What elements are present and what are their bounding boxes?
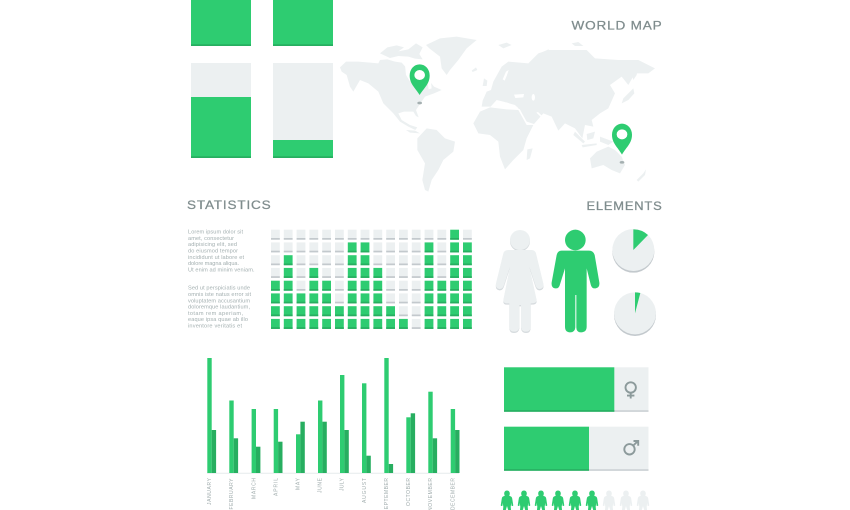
axis labels: months: JUNE bbox=[318, 477, 324, 493]
text block: first paragraph: Lorem ipsum dolor sit bbox=[188, 230, 243, 236]
bars: November bbox=[428, 392, 437, 473]
axis labels: months: AUGUST bbox=[362, 478, 368, 503]
axis labels: months: OCTOBER bbox=[406, 478, 412, 506]
block: top left bbox=[191, 0, 251, 46]
text block: second paragraph: Sed ut perspiciatis unde bbox=[188, 286, 250, 292]
heading: world map: WORLD MAP bbox=[572, 19, 662, 32]
gender bar: male bbox=[504, 427, 648, 471]
axis labels: months: DECEMBER bbox=[450, 478, 456, 510]
bars: July bbox=[340, 375, 349, 473]
text block: second paragraph: inventore veritatis et bbox=[188, 324, 242, 330]
text block: second paragraph: doloremque laudantium, bbox=[188, 305, 250, 311]
text block: second paragraph: eaque ipsa quae ab illo bbox=[188, 317, 248, 323]
text block: first paragraph: incididunt ut labore et bbox=[188, 255, 244, 261]
bars: February bbox=[229, 400, 238, 473]
text block: second paragraph: voluptatem accusantium bbox=[188, 298, 250, 304]
bars: August bbox=[362, 383, 371, 473]
axis labels: months: FEBRUARY bbox=[229, 478, 235, 510]
bars: April bbox=[274, 409, 282, 473]
axis labels: months: JANUARY bbox=[207, 477, 213, 505]
bars: December bbox=[451, 409, 460, 473]
gender bar: female bbox=[504, 367, 648, 412]
panel: percentage blocks bbox=[191, 0, 333, 158]
axis labels: months: MARCH bbox=[252, 478, 258, 499]
map pin: Australia bbox=[612, 124, 632, 164]
bar chart: monthly values bbox=[207, 358, 460, 474]
pie chart: upper bbox=[612, 229, 654, 273]
pie chart: lower bbox=[614, 292, 656, 336]
text block: first paragraph: do eiusmod tempor bbox=[188, 248, 238, 254]
bars: June bbox=[318, 400, 327, 473]
icon: male symbol bbox=[624, 441, 638, 454]
map pin: North America bbox=[410, 64, 430, 104]
text block: first paragraph: Ut enim ad minim veniam. bbox=[188, 268, 255, 274]
text block: first paragraph: amet, consectetur bbox=[188, 236, 234, 242]
axis labels: months: JULY bbox=[340, 477, 346, 491]
bars: January bbox=[207, 358, 216, 473]
axis labels: months: APRIL bbox=[274, 478, 280, 496]
axis labels: months: MAY bbox=[296, 477, 302, 490]
heading: statistics: STATISTICS bbox=[187, 199, 272, 212]
icon: female symbol bbox=[626, 382, 636, 398]
bars: May bbox=[296, 422, 305, 473]
icon: female figure bbox=[496, 230, 544, 333]
block: lower right, about one fifth filled bbox=[273, 63, 333, 158]
heading: elements: ELEMENTS bbox=[586, 200, 662, 213]
bars: September bbox=[384, 358, 393, 473]
text block: second paragraph: totam rem aperiam, bbox=[188, 311, 243, 317]
icon: male figure bbox=[552, 230, 599, 332]
text block: first paragraph: adipisicing elit, sed bbox=[188, 242, 237, 248]
bars: March bbox=[252, 409, 260, 473]
axis labels: months bbox=[207, 477, 456, 510]
waffle chart: monthly cells bbox=[271, 230, 472, 329]
block: lower left, about two thirds filled bbox=[191, 63, 251, 158]
block: top right bbox=[273, 0, 333, 46]
text block: second paragraph: omnis iste natus error sit bbox=[188, 292, 251, 298]
bars: October bbox=[406, 413, 415, 473]
text block: first paragraph bbox=[188, 230, 255, 274]
world map bbox=[340, 37, 655, 192]
text block: first paragraph: dolore magna aliqua. bbox=[188, 261, 239, 267]
text block: second paragraph bbox=[188, 286, 251, 330]
icon row: people count bbox=[501, 490, 649, 510]
